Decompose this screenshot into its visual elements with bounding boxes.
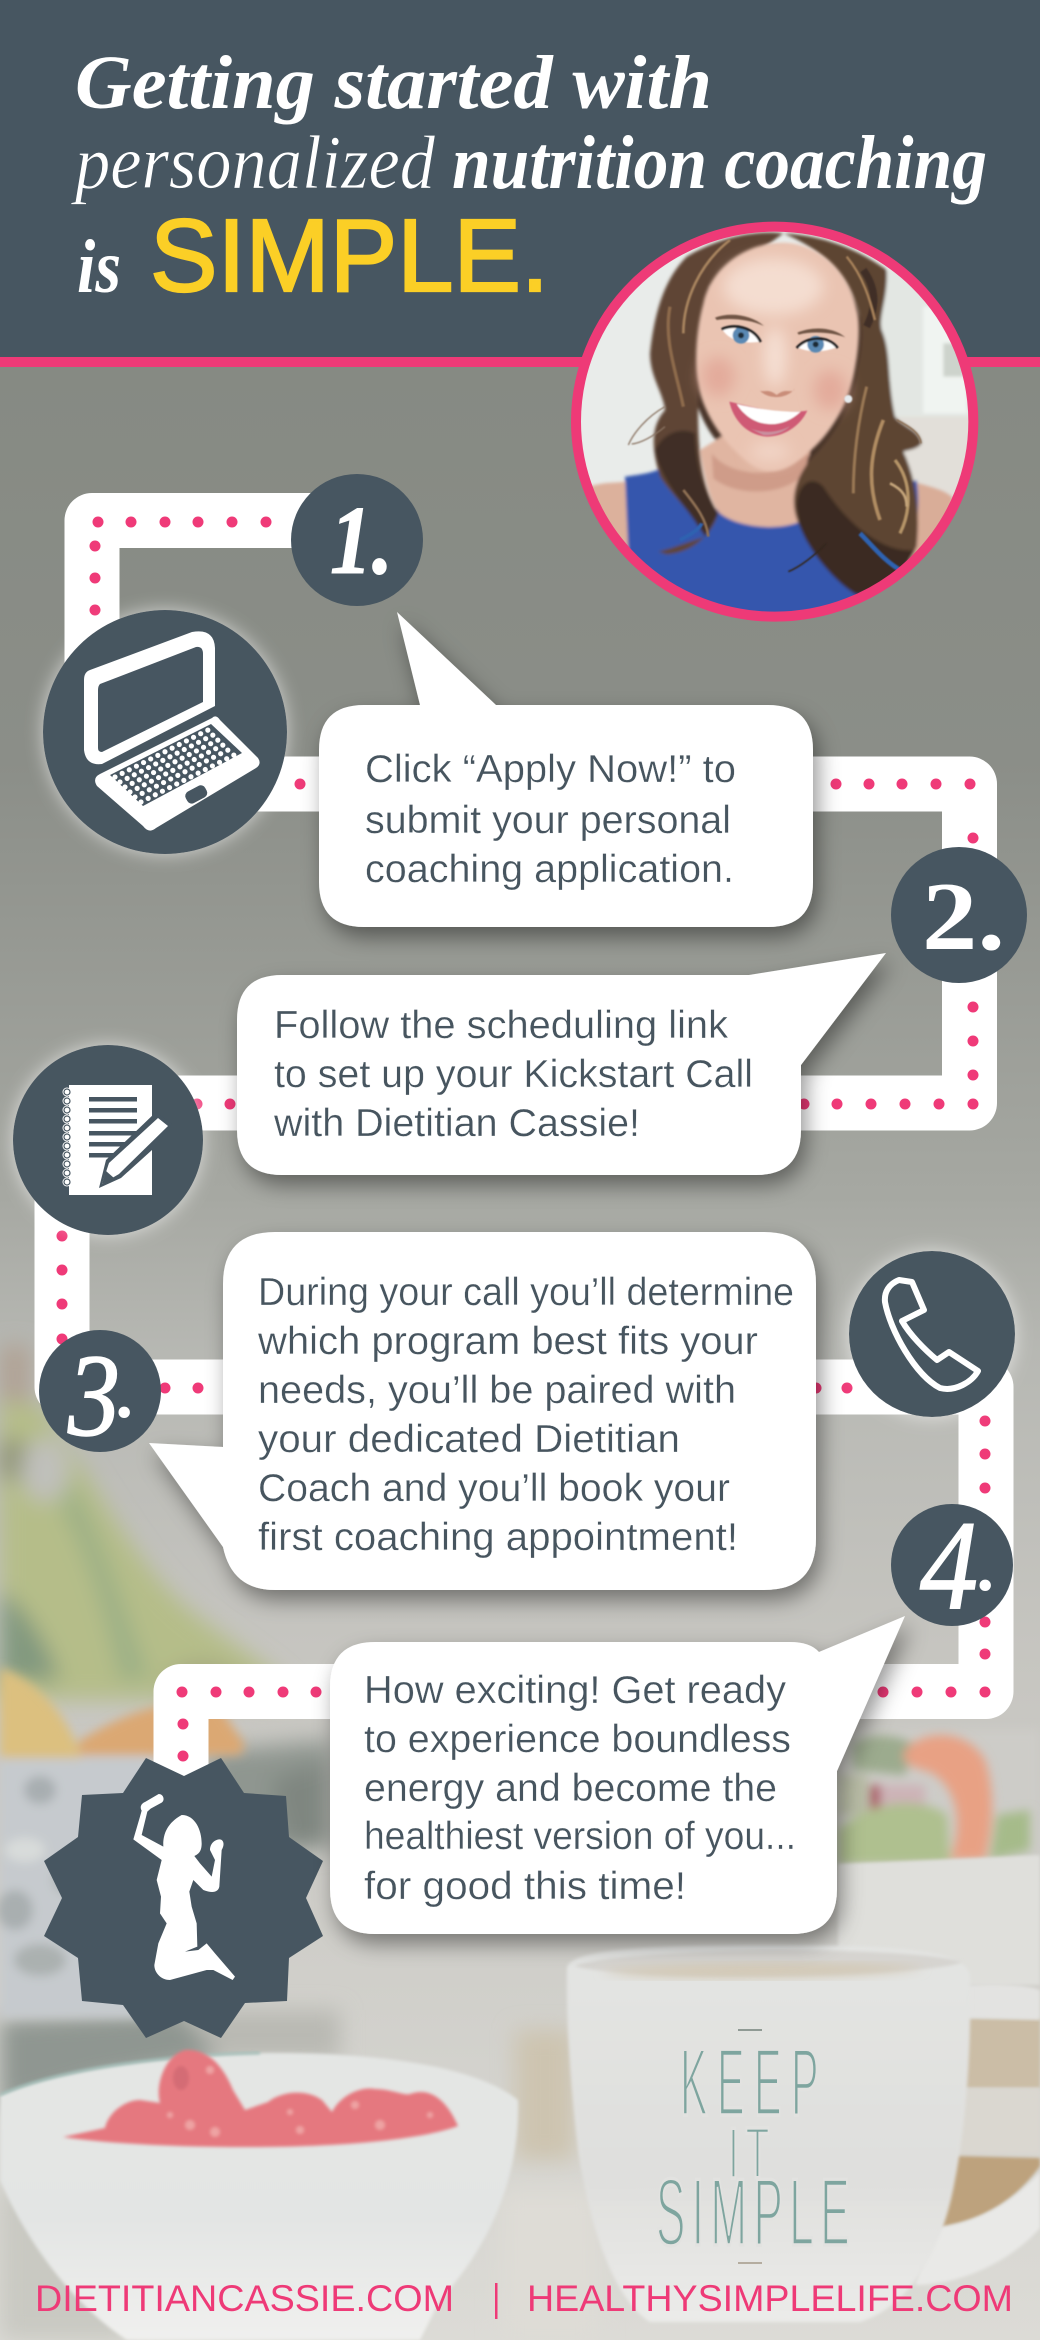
callout: step 3: first coaching appointment! <box>258 1516 738 1559</box>
title: nutrition coaching <box>452 121 987 205</box>
callout: step 2 <box>237 953 886 1175</box>
callout: step 3: your dedicated Dietitian <box>258 1418 680 1461</box>
step 4 number badge <box>891 1496 1013 1636</box>
callout: step 2: with Dietitian Cassie! <box>273 1102 640 1145</box>
callout: step 1: coaching application. <box>365 848 734 891</box>
background salad bowl <box>838 1730 1040 1985</box>
callout: step 4: How exciting! Get ready <box>364 1669 787 1712</box>
mug lettering: IT <box>728 2114 776 2194</box>
callout: step 1: submit your personal <box>365 799 731 842</box>
icon: star badge with jumping figure <box>44 1758 323 2038</box>
callout: step 3: needs, you’ll be paired with <box>258 1369 736 1412</box>
title: Getting started with <box>75 41 712 125</box>
dotted path: notepad to step 3 to phone to step 4 to star <box>56 1140 990 1899</box>
callout: step 3: which program best fits your <box>257 1320 758 1363</box>
title: is <box>77 225 121 309</box>
icon: telephone <box>849 1251 1015 1417</box>
pink divider bar <box>0 357 1040 367</box>
callout: step 4: healthiest version of you... <box>364 1815 796 1858</box>
step 3 number badge <box>39 1330 161 1461</box>
callout: step 2: Follow the scheduling link <box>274 1004 729 1047</box>
step 3 number badge: . <box>118 1356 136 1433</box>
portrait of Dietitian Cassie <box>576 227 980 640</box>
callout: step 4: for good this time! <box>364 1865 686 1908</box>
step 2 number badge <box>891 847 1027 983</box>
footer website links: DIETITIANCASSIE.COM <box>35 2278 454 2319</box>
callout: step 4 <box>330 1616 905 1934</box>
footer website links: HEALTHYSIMPLELIFE.COM <box>527 2278 1013 2319</box>
mug lettering <box>656 2029 856 2266</box>
icon: laptop <box>43 610 287 854</box>
callout: step 3 <box>149 1232 816 1590</box>
title: SIMPLE. <box>150 198 549 313</box>
bowl of raspberries <box>0 2050 518 2340</box>
mug lettering: KEEP <box>680 2029 828 2136</box>
callout: step 2: to set up your Kickstart Call <box>274 1053 753 1096</box>
step 4 number badge: 4 <box>920 1496 978 1636</box>
step 1 number badge <box>291 474 423 606</box>
callout: step 4: energy and become the <box>364 1767 777 1810</box>
mug with Keep It Simple lettering <box>567 1945 1040 2322</box>
footer website links <box>35 2278 1013 2319</box>
callout: step 1: Click “Apply Now!” to <box>365 748 736 791</box>
icon: notepad and pencil <box>13 1045 203 1235</box>
step 3 number badge: 3 <box>67 1330 120 1461</box>
step 4 number badge: . <box>979 1529 996 1606</box>
callout: step 1 <box>319 612 813 927</box>
jumping woman silhouette <box>133 1794 235 1980</box>
header band <box>0 0 1040 357</box>
title <box>70 41 987 313</box>
callout: step 3: During your call you’ll determine <box>258 1271 794 1314</box>
step 1 number badge: 1. <box>330 487 393 595</box>
callout: step 4: to experience boundless <box>364 1718 791 1761</box>
dotted path: step 1 to laptop <box>90 516 357 732</box>
callout: step 3: Coach and you’ll book your <box>258 1467 730 1510</box>
title: personalized <box>70 121 436 205</box>
dotted path: step 1 to step 2 to notepad <box>108 778 978 1110</box>
step 2 number badge: 2. <box>922 863 1005 971</box>
